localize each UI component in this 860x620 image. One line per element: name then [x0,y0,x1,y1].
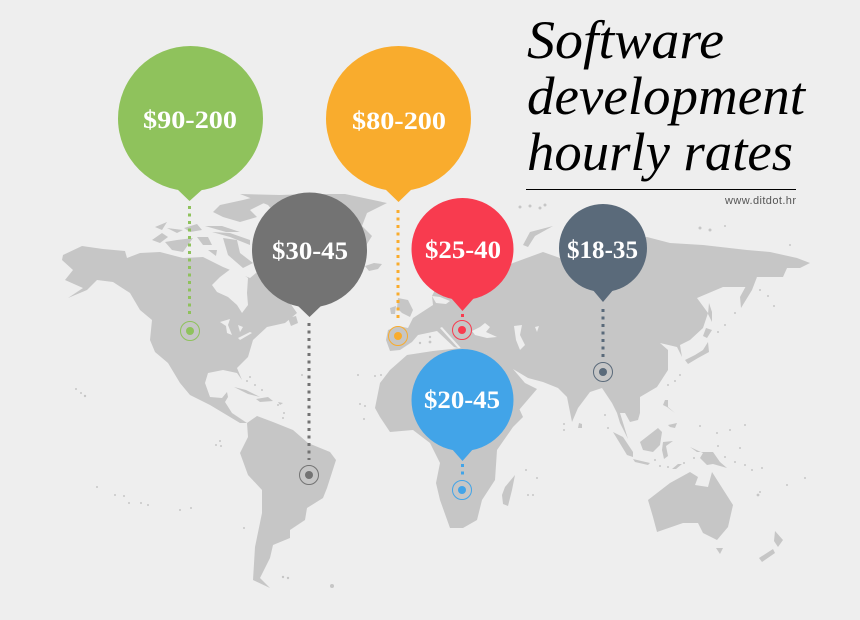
bubble: Eastern Europe [412,198,514,311]
Aral Sea [535,326,539,332]
bubble: Western Europe [326,46,471,202]
New Guinea [690,447,727,468]
bubble: Asia [559,204,647,302]
Africa [375,347,523,528]
Borneo [640,428,662,452]
Caribbean islands [234,387,283,405]
dotted connector: Eastern Europe [461,314,464,317]
source: www.ditdot.hr [724,195,796,207]
bubble: South America [252,192,367,317]
world map [62,194,810,588]
Australia [648,472,733,540]
Madagascar [502,475,515,506]
title [527,10,807,182]
Eurasia [386,237,810,439]
UK and Ireland [390,298,413,317]
dotted connector: Western Europe [396,210,400,318]
Sumatra [613,432,633,457]
bubble: Africa [412,349,514,461]
title: development [527,66,807,126]
title: Software [527,10,724,70]
dotted connector: Africa [461,464,464,475]
Sakhalin and Kamchatka [708,277,757,322]
dotted connector: Asia [602,309,604,357]
rate: North America: $90-200 [143,107,237,134]
Tasmania [716,548,723,554]
Novaya Zemlya [523,226,553,247]
Small islands [75,204,806,588]
rate: Eastern Europe: $25-40 [425,237,501,264]
rate: Asia: $18-35 [567,237,638,264]
Sea cut-outs [212,268,539,350]
Sri Lanka [578,423,582,428]
marker: Western Europe [388,326,408,346]
South America [240,416,336,588]
rate: South America: $30-45 [272,238,348,265]
Iceland [365,263,382,271]
marker: Eastern Europe [452,320,472,340]
bubble: North America [118,46,263,201]
Baltic Sea [432,296,450,304]
title rule [526,189,796,190]
marker: Asia [594,362,612,382]
marker: North America [180,322,200,340]
North America [62,246,297,423]
Greenland [240,194,387,285]
Caspian Sea [514,325,525,350]
marker: South America [300,466,318,484]
Hudson Bay [212,268,248,313]
Java and Lesser Sunda [633,459,682,469]
Japan [685,328,712,364]
title: hourly rates [527,122,793,182]
Arctic islands [152,195,270,268]
marker: Africa [452,480,472,500]
Newfoundland [288,316,298,326]
rate: Western Europe: $80-200 [352,108,446,135]
rate: Africa: $20-45 [424,387,500,414]
Black Sea [472,323,497,338]
dotted connector: North America [188,206,191,314]
Great Lakes [220,319,252,340]
Sulawesi [662,441,673,459]
New Zealand [759,531,783,562]
Philippines [663,400,677,428]
dotted connector: South America [308,323,310,460]
